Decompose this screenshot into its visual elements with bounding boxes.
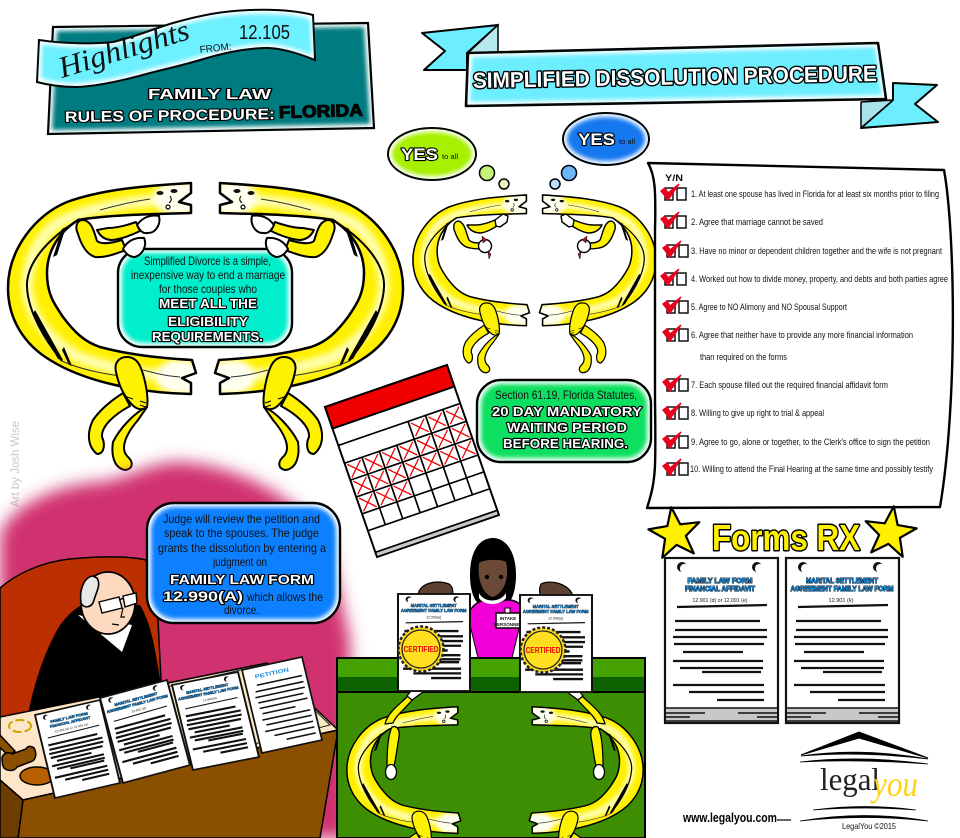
checklist item 8 xyxy=(663,403,824,419)
link: website: www.legalyou.com xyxy=(682,810,777,825)
speech bubble: yes to all green xyxy=(388,128,509,189)
speech bubble: yes to all blue: YES xyxy=(578,130,615,149)
speech bubble: yes to all blue: to all xyxy=(619,137,635,146)
callout: simplified divorce: Simplified Divorce is a simple, xyxy=(144,254,271,268)
checklist item 10 xyxy=(663,459,933,475)
document: certified left: AGREEMENT FAMILY LAW FORM xyxy=(401,608,467,613)
ribbon: highlights xyxy=(37,10,315,87)
heading: rules of procedure: RULES OF PROCEDURE: xyxy=(65,106,275,126)
heading: procedure title: SIMPLIFIED DISSOLUTION PROCEDURE xyxy=(473,61,877,93)
checklist item 3 xyxy=(663,241,942,257)
checklist item 5: 5. Agree to NO Alimony and NO Spousal Support xyxy=(691,302,847,313)
callout: simplified divorce: REQUIREMENTS. xyxy=(152,329,263,344)
callout: judge review: FAMILY LAW FORM xyxy=(170,572,314,587)
document: certified left xyxy=(398,582,470,691)
illustration: small broken ring xyxy=(413,193,656,373)
blouse xyxy=(470,600,522,658)
document: certified left: MARITAL SETTLEMENT xyxy=(411,603,457,608)
illustration: green counter xyxy=(337,658,645,838)
seal: certified: CERTIFIED xyxy=(526,646,561,655)
checklist item 5 xyxy=(663,297,847,313)
callout: waiting period: BEFORE HEARING. xyxy=(503,436,628,451)
document: petition on desk xyxy=(242,657,322,753)
form: financial affidavit: FAMILY LAW FORM xyxy=(688,578,753,585)
checklist item 6 xyxy=(663,325,913,363)
hair xyxy=(470,538,516,604)
panel: title plaque xyxy=(37,10,374,134)
head xyxy=(81,572,135,634)
document: settlement agreement on desk: MARITAL SETTLEMENT xyxy=(114,691,158,707)
document: financial affidavit on desk xyxy=(35,700,120,798)
document: financial affidavit on desk: FAMILY LAW FORM xyxy=(50,711,88,724)
checklist item 4 xyxy=(661,269,948,285)
label: from: FROM: xyxy=(199,42,232,56)
form: financial affidavit: 12.901 (d) or 12.091 (e) xyxy=(692,598,748,604)
credit: artist: Art by Josh Wise xyxy=(8,421,22,507)
face xyxy=(479,560,507,597)
panel: eligibility checklist: Y/N xyxy=(665,173,683,184)
logo: legalyou: legal xyxy=(820,761,880,797)
background: pink courtroom wall xyxy=(0,462,350,838)
callout: simplified divorce: MEET ALL THE xyxy=(159,296,257,311)
logo: legalyou: you xyxy=(870,764,918,804)
document: certified left: 12.990(a) xyxy=(426,616,441,620)
checklist item 9 xyxy=(663,432,930,448)
badge xyxy=(494,608,522,628)
banner: simplified dissolution procedure xyxy=(422,25,938,128)
callout: waiting period: WAITING PERIOD xyxy=(507,420,627,435)
illustration: calendar with 20 crossed days xyxy=(325,365,499,557)
callout: waiting period: 20 DAY MANDATORY xyxy=(492,404,642,419)
form: marital settlement agreement xyxy=(786,558,899,723)
heading: Highlights: Highlights xyxy=(53,14,193,85)
illustration: judge's desk xyxy=(0,663,338,838)
glasses xyxy=(99,593,137,613)
document: petition on desk: PETITION xyxy=(254,668,290,681)
collar xyxy=(78,615,132,652)
callout: simplified divorce: ELIGIBILITY xyxy=(168,314,248,329)
heading: forms rx with stars: Forms RX xyxy=(712,517,860,558)
callout: judge review: speak to the spouses. The judge xyxy=(164,526,319,540)
label: rule number: 12.105 xyxy=(239,22,290,44)
logo: legalyou xyxy=(800,732,928,831)
speech bubble: yes to all green: to all xyxy=(442,152,458,161)
callout: simplified divorce: for those couples who xyxy=(159,282,257,296)
callout: judge review: divorce. xyxy=(224,603,259,617)
illustration: large broken ring xyxy=(8,180,403,470)
form: financial affidavit: FINANCIAL AFFIDAVIT xyxy=(685,586,756,593)
checklist item 1 xyxy=(661,184,939,200)
callout: simplified divorce: inexpensive way to end a marriage xyxy=(131,268,285,282)
form: financial affidavit xyxy=(665,558,778,723)
document: certified right: MARITAL SETTLEMENT xyxy=(533,604,579,609)
callout: judge review: grants the dissolution by entering a xyxy=(158,541,326,555)
checklist item 6: than required on the forms xyxy=(700,352,787,363)
speech bubble: yes to all blue xyxy=(550,113,649,189)
document: certified agreement on desk: 12.990(a) xyxy=(202,696,217,702)
document: certified agreement on desk: MARITAL SETTLEMENT xyxy=(186,682,229,695)
badge: PERSONNEL xyxy=(494,622,522,627)
illustration: intake clerk xyxy=(470,538,522,658)
document: certified agreement on desk: AGREEMENT FAMILY LAW FORM xyxy=(178,685,240,701)
document: financial affidavit on desk: FINANCIAL AFFIDAVIT xyxy=(49,715,91,729)
document: settlement agreement on desk: 12.901 (k) xyxy=(131,706,147,714)
illustration: judge in chair xyxy=(0,557,162,720)
callout: judge review: Judge will review the petition and xyxy=(163,512,320,526)
document: certified agreement on desk xyxy=(172,672,259,770)
document: settlement agreement on desk xyxy=(100,680,190,783)
chair xyxy=(0,557,162,720)
checklist item 2 xyxy=(661,212,823,228)
document: certified right: AGREEMENT FAMILY LAW FORM xyxy=(523,609,589,614)
checklist item 8: 8. Willing to give up right to trial & appeal xyxy=(691,408,824,419)
speech bubble: yes to all green: YES xyxy=(401,145,438,164)
heading: forms rx with stars xyxy=(646,503,919,559)
document: certified right xyxy=(520,582,592,692)
illustration: large ring arms xyxy=(76,215,335,257)
callout: judge review: which allows the xyxy=(246,590,323,604)
callout: waiting period: Section 61.19, Florida Statutes, xyxy=(495,388,637,402)
logo: legalyou: LegalYou ©2015 xyxy=(842,821,896,831)
document: settlement agreement on desk: AGREEMENT FAMILY LAW FORM xyxy=(106,693,169,714)
icon: gavel xyxy=(0,720,54,785)
callout: simplified divorce xyxy=(118,249,292,347)
document: financial affidavit on desk: 12.901 (d) or 12.091 (e) xyxy=(54,722,89,734)
form: marital settlement agreement: AGREEMENT FAMILY LAW FORM xyxy=(790,586,894,593)
callout: judge review: 12.990(A) xyxy=(163,588,243,604)
callout: judge review: judgment on xyxy=(212,555,267,569)
robe xyxy=(28,600,162,714)
form: marital settlement agreement: 12.901 (k) xyxy=(828,598,854,604)
seal: certified: CERTIFIED xyxy=(404,645,439,654)
hair xyxy=(81,576,99,607)
document: certified right: 12.990(a) xyxy=(548,617,563,621)
badge: INTAKE xyxy=(500,616,516,621)
checklist item 7 xyxy=(663,375,888,391)
heading: family law: FAMILY LAW xyxy=(148,86,272,103)
checklist item 2: 2. Agree that marriage cannot be saved xyxy=(691,217,823,228)
illustration: couple ring at counter xyxy=(347,684,643,838)
panel: eligibility checklist xyxy=(647,163,953,508)
callout: judge review xyxy=(147,503,340,623)
heading: Florida: FLORIDA xyxy=(279,101,363,122)
checklist item 7: 7. Each spouse filled out the required financial affidavit form xyxy=(691,380,888,391)
form: marital settlement agreement: MARITAL SETTLEMENT xyxy=(806,578,879,585)
callout: waiting period xyxy=(477,380,651,462)
